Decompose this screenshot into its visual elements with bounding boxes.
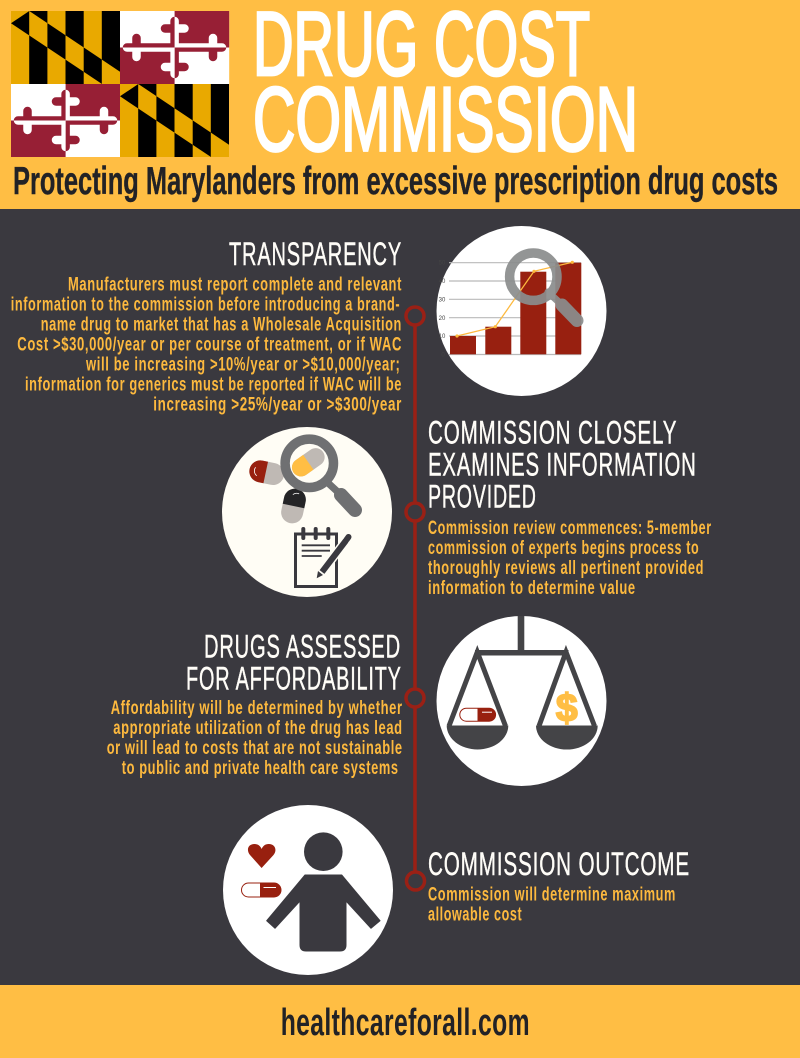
body: affordability: or will lead to costs that are not sustainable [107,738,403,759]
body: transparency: increasing >25%/year or >$300/year [153,395,402,416]
icon: person with heart and pill [223,805,393,975]
body: outcome: Commission will determine maximum [428,885,676,906]
body: outcome: allowable cost [428,905,522,926]
heading: drugs assessed for affordability: DRUGS ASSESSED [204,628,401,664]
heading: drugs assessed for affordability: FOR AFFORDABILITY [186,661,402,697]
icon: bar chart with magnifier [436,226,606,396]
body: transparency: Cost >$30,000/year or per course of treatment, or if WAC [17,335,402,356]
black capsule [279,487,308,525]
body: outcome [428,885,676,926]
icon: bar chart with magnifier: 40 [439,279,446,285]
red capsule [247,458,286,487]
body: transparency [11,275,402,416]
icon: pills, magnifier and notepad [222,427,392,597]
body: transparency: Manufacturers must report complete and relevant [68,275,402,296]
body: commission review [428,518,712,599]
dollar sign on right pan: $ [556,687,578,730]
body: transparency: information for generics must be reported if WAC will be [25,375,402,396]
body: transparency: name drug to market that has a Wholesale Acquisition [41,315,402,336]
section: transparency text [11,236,402,416]
body: commission review: information to determine value [428,578,636,599]
pill [242,883,281,897]
heading: drugs assessed for affordability [186,628,402,697]
body: affordability [107,698,403,779]
body: affordability: to public and private health care systems [122,758,399,779]
icon: bar chart with magnifier: 0 [441,352,445,358]
icon: bar chart with magnifier: 50 [439,260,446,266]
body: transparency: will be increasing >10%/year or >$10,000/year; [85,355,400,376]
section: commission examines text [428,414,712,599]
flag of Maryland [11,11,229,157]
heart [248,844,275,868]
notepad and pen [296,529,348,586]
header band [0,0,800,209]
section: affordability text [107,628,403,779]
icon: balance scale [436,616,606,786]
icon: bar chart with magnifier: 30 [439,298,446,304]
icon: bar chart with magnifier: 20 [439,316,446,322]
heading: commission closely examines [428,414,697,515]
section: outcome text [428,846,690,926]
website: healthcareforall.com [281,1002,530,1044]
timeline [406,307,424,890]
pill on left pan [460,708,496,721]
heading: transparency: TRANSPARENCY [229,236,402,272]
body: transparency: information to the commission before introducing a brand- [11,295,400,316]
footer band [0,985,800,1058]
title [253,0,638,170]
magnifier with yellow capsule [285,439,355,510]
body: affordability: Affordability will be determined by whether [111,698,403,719]
body: affordability: appropriate utilization of the drug has lead [113,718,403,739]
icon: bar chart with magnifier: 10 [439,334,446,340]
heading: commission closely examines: PROVIDED [428,479,537,515]
